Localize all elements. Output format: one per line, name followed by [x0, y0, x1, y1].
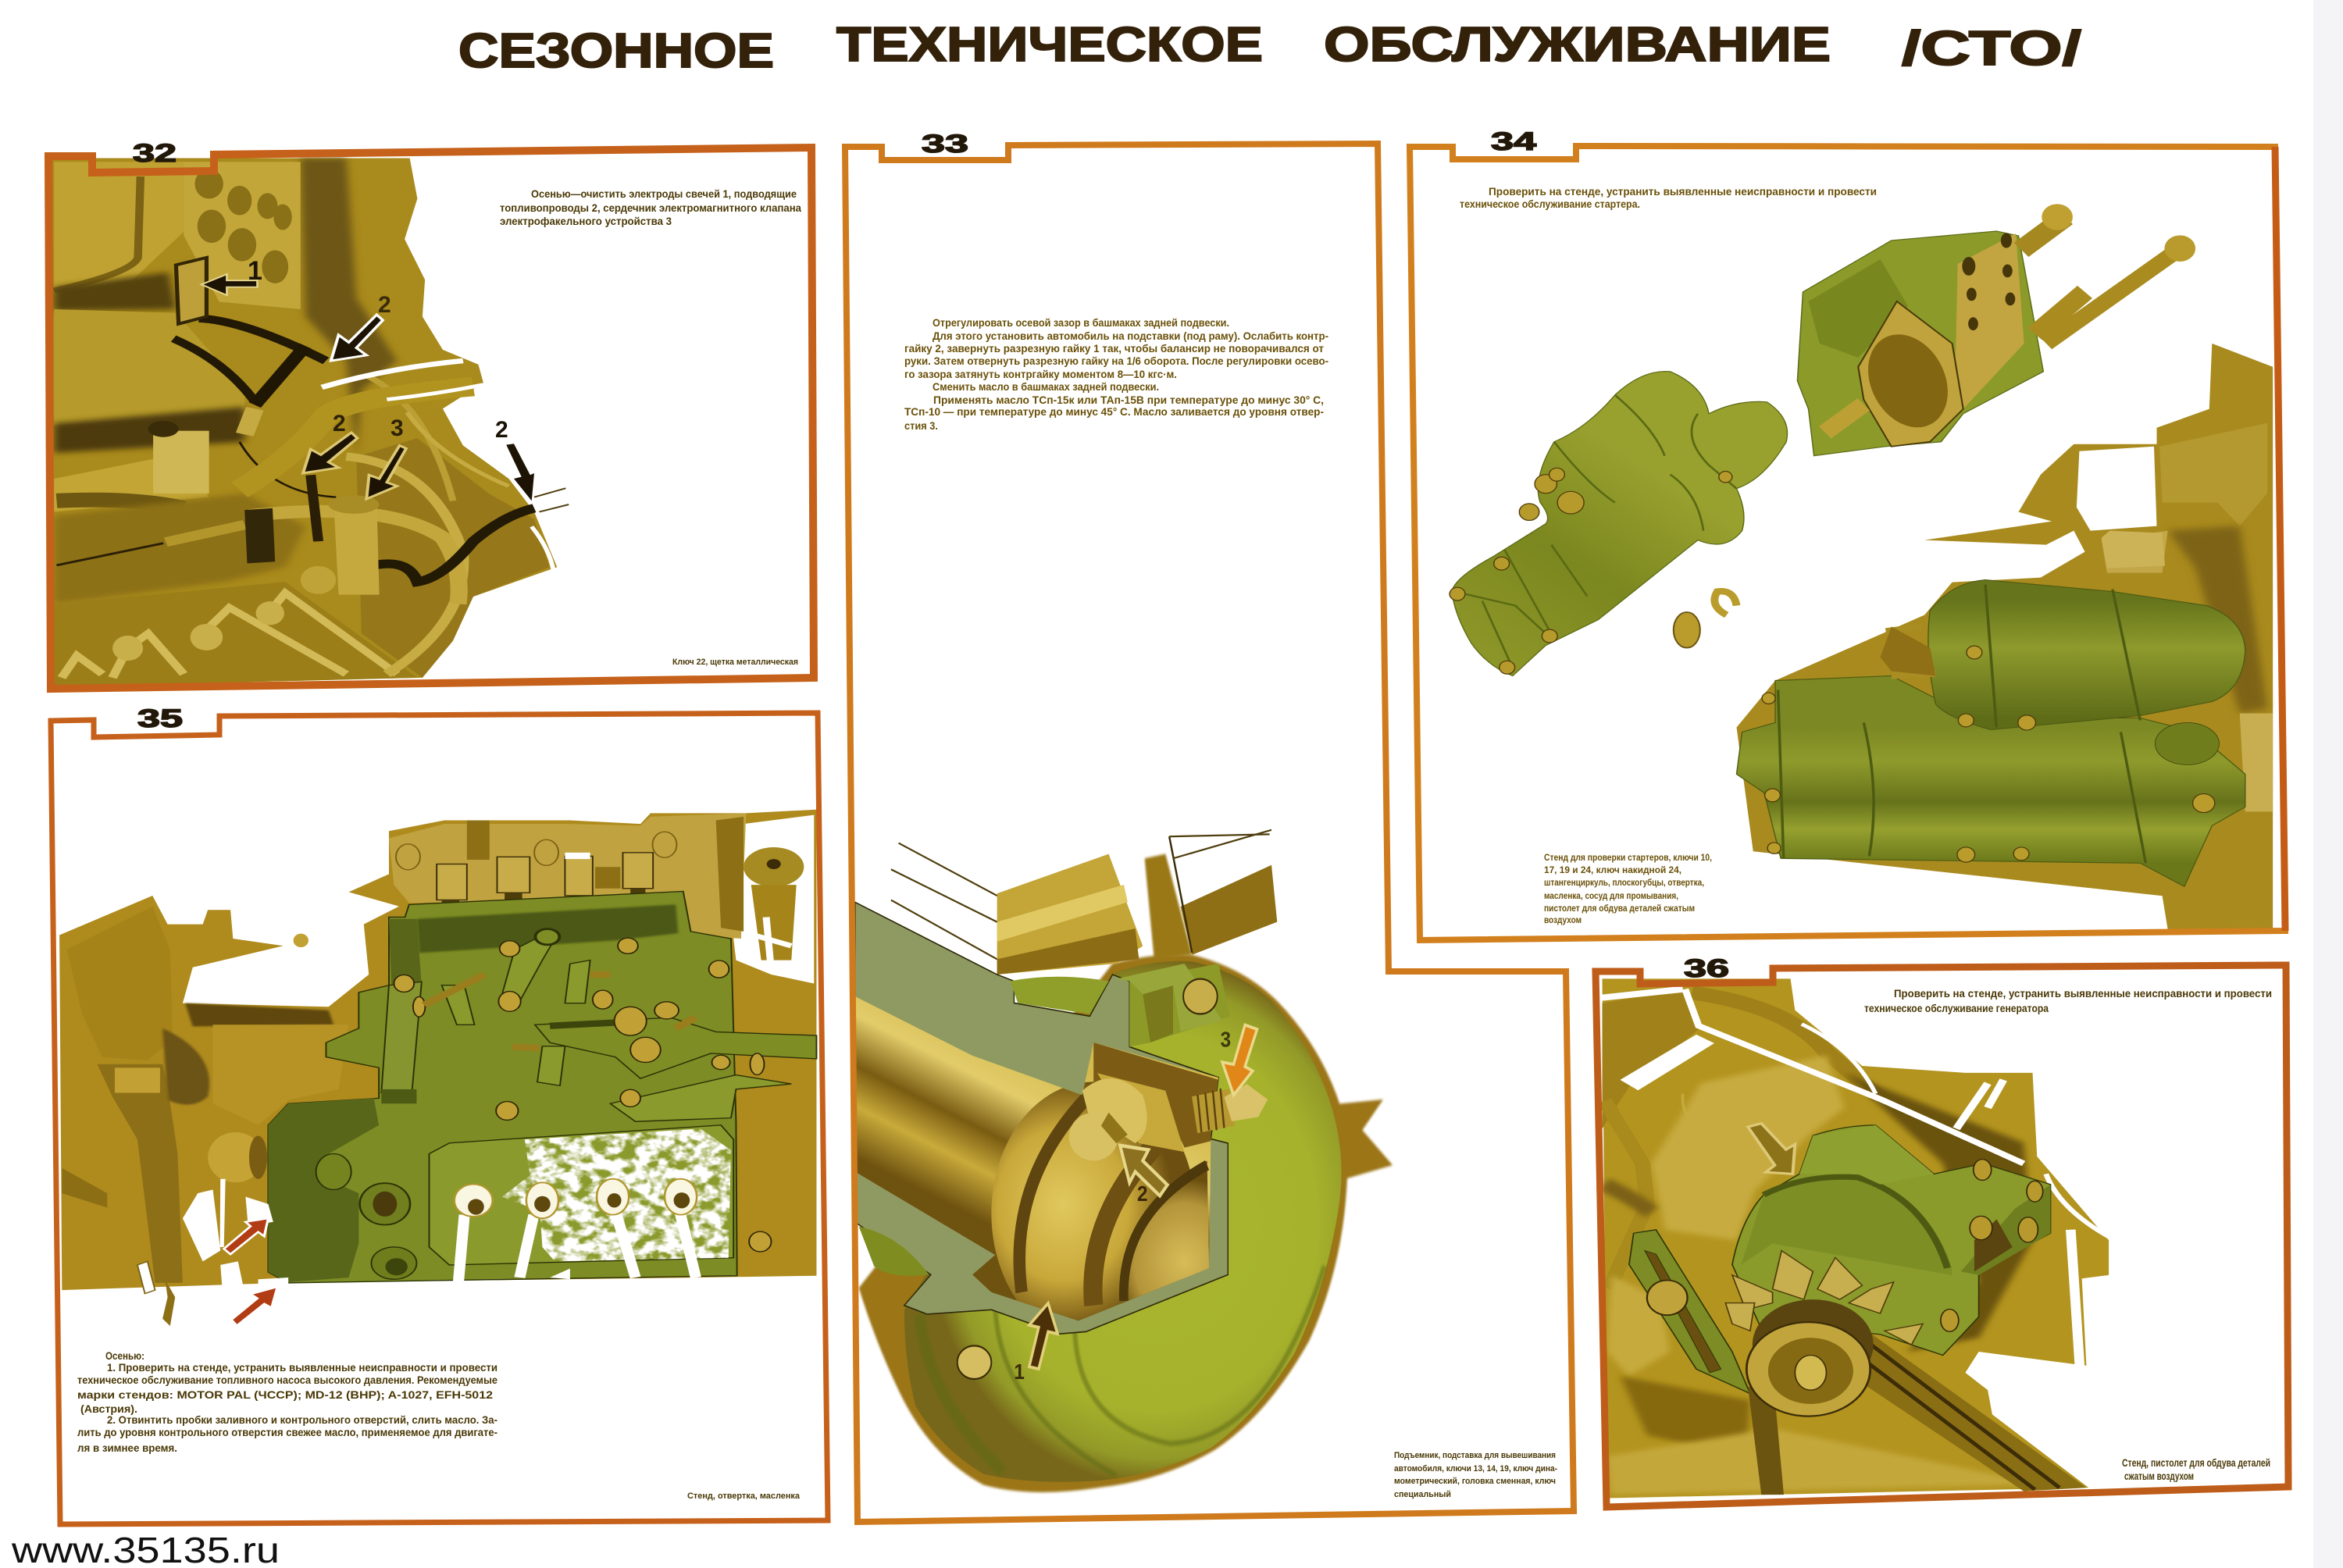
panel 36: generator: [1596, 954, 2288, 1507]
frame 35: [51, 713, 828, 1524]
hoses and injector: [57, 319, 534, 674]
title: [458, 18, 2081, 78]
callout numbers 33: 2: [1137, 1181, 1147, 1206]
mounted starter: [1737, 675, 2245, 886]
panel 32: spark plugs and fuel lines: [48, 139, 814, 689]
tools 33: автомобиля, ключи 13, 14, 19, ключ дина-: [1394, 1464, 1557, 1474]
text 32: [500, 188, 801, 227]
tools 36: сжатым воздухом: [2124, 1470, 2194, 1482]
text 33: Отрегулировать осевой зазор в башмаках задней подвески.: [933, 317, 1229, 329]
frame 33: [845, 144, 1574, 1522]
tools 33: Подъемник, подставка для вывешивания: [1394, 1451, 1556, 1460]
axle and bearing inside cavity: [856, 996, 1218, 1321]
tools 34: Стенд для проверки стартеров, ключи 10,: [1544, 852, 1712, 863]
text 36: [1864, 988, 2272, 1014]
text 34: техническое обслуживание стартера.: [1460, 198, 1640, 210]
callout numbers 32: 1: [248, 256, 262, 286]
panel 34: starter: [1410, 127, 2285, 940]
text 35: техническое обслуживание топливного насоса высокого давления. Рекомендуемые: [77, 1374, 497, 1386]
text 35: 1. Проверить на стенде, устранить выявленные неисправности и провести: [107, 1362, 497, 1374]
tools 35: Стенд, отвертка, масленка: [687, 1491, 801, 1501]
panel 33: rear suspension: [845, 130, 1574, 1522]
tools 36: Стенд, пистолет для обдува деталей: [2122, 1457, 2270, 1469]
tools 33: [1394, 1451, 1557, 1499]
title: СЕЗОННОЕ: [458, 24, 774, 78]
title: ТЕХНИЧЕСКОЕ: [836, 18, 1263, 72]
text 33: стия 3.: [904, 420, 938, 432]
panel number 36: 36: [1684, 954, 1729, 982]
exploded starter: [1452, 372, 1788, 675]
text 35: 2. Отвинтить пробки заливного и контрольного отверстий, слить масло. За-: [107, 1414, 497, 1426]
white cut lines: [322, 361, 554, 571]
callout numbers 33: 1: [1014, 1359, 1025, 1384]
grey housing section: [855, 902, 1228, 1334]
text 33: Сменить масло в башмаках задней подвески.: [933, 381, 1159, 393]
fan blades: [1725, 1251, 1923, 1345]
frame 34 right edge: [2275, 147, 2285, 931]
green pump body: [268, 891, 737, 1283]
text 32: электрофакельного устройства 3: [500, 216, 672, 227]
text 33: ТСп-10 — при температуре до минус 45° С. Масло заливается до уровня отвер-: [904, 406, 1324, 418]
text 34: [1460, 186, 1877, 210]
text 35: Осенью:: [105, 1350, 144, 1362]
bolts 35: [394, 938, 772, 1252]
tools 33: мометрический, головка сменная, ключ: [1394, 1477, 1556, 1486]
illustration 36: [1600, 978, 2109, 1499]
text 33: Для этого установить автомобиль на подставки (под раму). Ослабить контр-: [933, 330, 1328, 342]
frame 34: [1410, 146, 2285, 940]
bracket: [1629, 1230, 1750, 1394]
tools 34: пистолет для обдува деталей сжатым: [1544, 903, 1695, 914]
text 33: гайку 2, завернуть разрезную гайку 1 так, чтобы балансир не поворачивался от: [904, 343, 1324, 355]
red arrows: [224, 1218, 276, 1324]
tools 32: Ключ 22, щетка металлическая: [672, 657, 798, 667]
text 35: ля в зимнее время.: [77, 1442, 177, 1454]
illustration 33: [851, 830, 1393, 1492]
white patches: [183, 1179, 288, 1297]
tools 34: [1544, 852, 1712, 925]
speckled worn paint patch: [502, 1128, 731, 1261]
small parts below 35: [137, 1261, 175, 1326]
panel number 33: 33: [922, 130, 968, 158]
title: /СТО/: [1902, 22, 2081, 76]
text 35: марки стендов: MOTOR PAL (ЧССР); MD-12 (ВНР); A-1027, EFH-5012: [77, 1389, 493, 1401]
illustration 34: [1450, 204, 2273, 929]
text 34: Проверить на стенде, устранить выявленные неисправности и провести: [1489, 186, 1877, 198]
solenoid housing: [1797, 231, 2043, 456]
text 35: лить до уровня контрольного отверстия свежее масло, применяемое для двигате-: [77, 1427, 497, 1438]
fuel outlets: [455, 1179, 697, 1283]
tools 34: 17, 19 и 24, ключ накидной 24,: [1544, 864, 1681, 875]
alternator: [1732, 1125, 2050, 1356]
background engine 34: [1737, 344, 2273, 929]
text 35: [77, 1350, 497, 1454]
title: ОБСЛУЖИВАНИЕ: [1324, 18, 1831, 72]
threaded bolt: [1192, 1089, 1235, 1133]
callout numbers 33: 3: [1221, 1027, 1231, 1052]
frame 36: [1596, 965, 2288, 1507]
text 33: Применять масло ТСп-15к или ТАп-15В при температуре до минус 30° С,: [933, 394, 1324, 406]
tools 36: [2122, 1457, 2270, 1482]
callout numbers 32: 2: [378, 292, 391, 318]
tools 34: воздухом: [1544, 914, 1582, 925]
panel number 34: 34: [1491, 127, 1536, 155]
callout arrows: [201, 274, 534, 501]
text 32: Осенью—очистить электроды свечей 1, подводящие: [531, 188, 797, 200]
callout numbers 33: [1014, 1027, 1231, 1384]
tools 34: штангенциркуль, плоскогубцы, отвертка,: [1544, 877, 1704, 888]
text 36: техническое обслуживание генератора: [1864, 1003, 2049, 1014]
text 36: Проверить на стенде, устранить выявленные неисправности и провести: [1894, 988, 2272, 1000]
callout numbers 32: 3: [390, 415, 404, 441]
callout numbers 32: 2: [495, 417, 508, 443]
illustration 35: [59, 810, 816, 1326]
text 33: руки. Затем отвернуть разрезную гайку на 1/6 оборота. После регулировки осево-: [904, 355, 1328, 367]
text 35: (Австрия).: [80, 1403, 137, 1415]
arrow 36: [1748, 1124, 1795, 1174]
upper bracket with bolts: [389, 813, 746, 939]
right scan margin: [2313, 0, 2343, 1568]
tools 33: специальный: [1394, 1490, 1451, 1499]
callout numbers 32: 2: [333, 411, 346, 437]
carburettor and left engine: [67, 907, 173, 1060]
drive hex nut: [316, 1154, 416, 1279]
white cut lines 36: [1600, 989, 2109, 1366]
callout numbers 32: [248, 256, 508, 443]
illustration 32: [52, 158, 569, 687]
callout arrows 33: [1029, 1025, 1257, 1369]
panel number 35: 35: [137, 704, 183, 732]
text 32: топливопроводы 2, сердечник электромагнитного клапана: [500, 202, 801, 214]
text 33: [904, 317, 1328, 432]
tools 34: масленка, сосуд для промывания,: [1544, 890, 1678, 901]
belt and pulley: [1831, 1327, 2086, 1491]
panel number 32: 32: [133, 139, 177, 167]
text 33: го зазора затянуть контргайку моментом 8—10 кгс·м.: [904, 369, 1177, 380]
frame 32: [48, 148, 814, 689]
nut and ring: [1674, 591, 1737, 648]
panel 35: high-pressure fuel pump: [51, 704, 828, 1524]
